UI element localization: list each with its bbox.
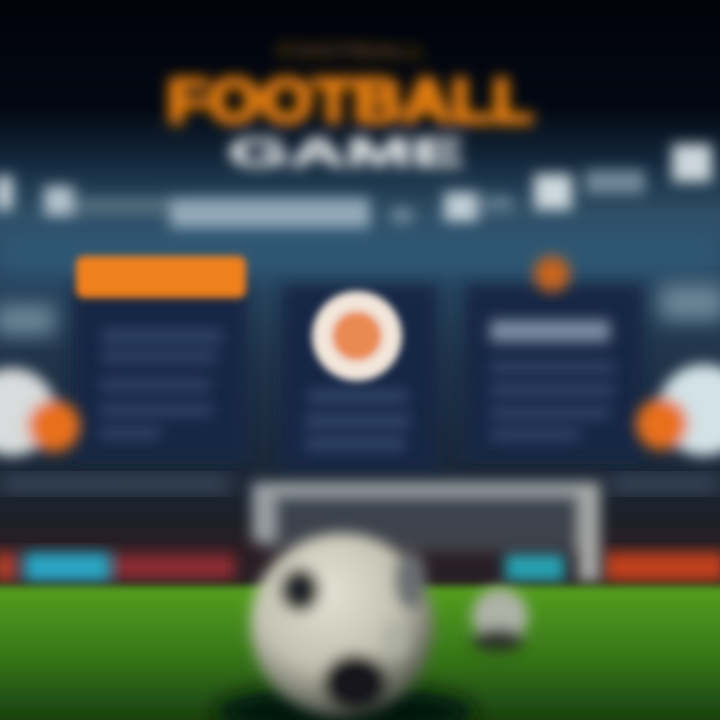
left ball icon	[0, 368, 80, 456]
blue band below lights	[0, 232, 720, 276]
title sub: GAME	[228, 131, 464, 175]
panel: columns	[72, 285, 643, 470]
right ball icon	[636, 364, 720, 456]
football	[250, 533, 434, 717]
panel text: right	[490, 320, 615, 440]
panel text: left	[100, 330, 222, 438]
title main: FOOTBALL	[167, 67, 533, 136]
football goal	[252, 482, 600, 582]
small ball	[472, 588, 528, 652]
title	[167, 41, 533, 175]
side text blocks	[0, 285, 720, 335]
panel text: center	[305, 390, 410, 450]
advertising boards	[0, 552, 720, 582]
orange top icon right	[534, 256, 570, 292]
stadium lights row	[0, 144, 712, 230]
center round icon	[312, 291, 402, 381]
lower crowd strip	[0, 476, 720, 492]
orange header badge	[76, 256, 246, 298]
pitch	[0, 586, 720, 720]
title eyebrow: FOOTBALL	[277, 41, 427, 63]
ball shadow	[215, 686, 475, 720]
